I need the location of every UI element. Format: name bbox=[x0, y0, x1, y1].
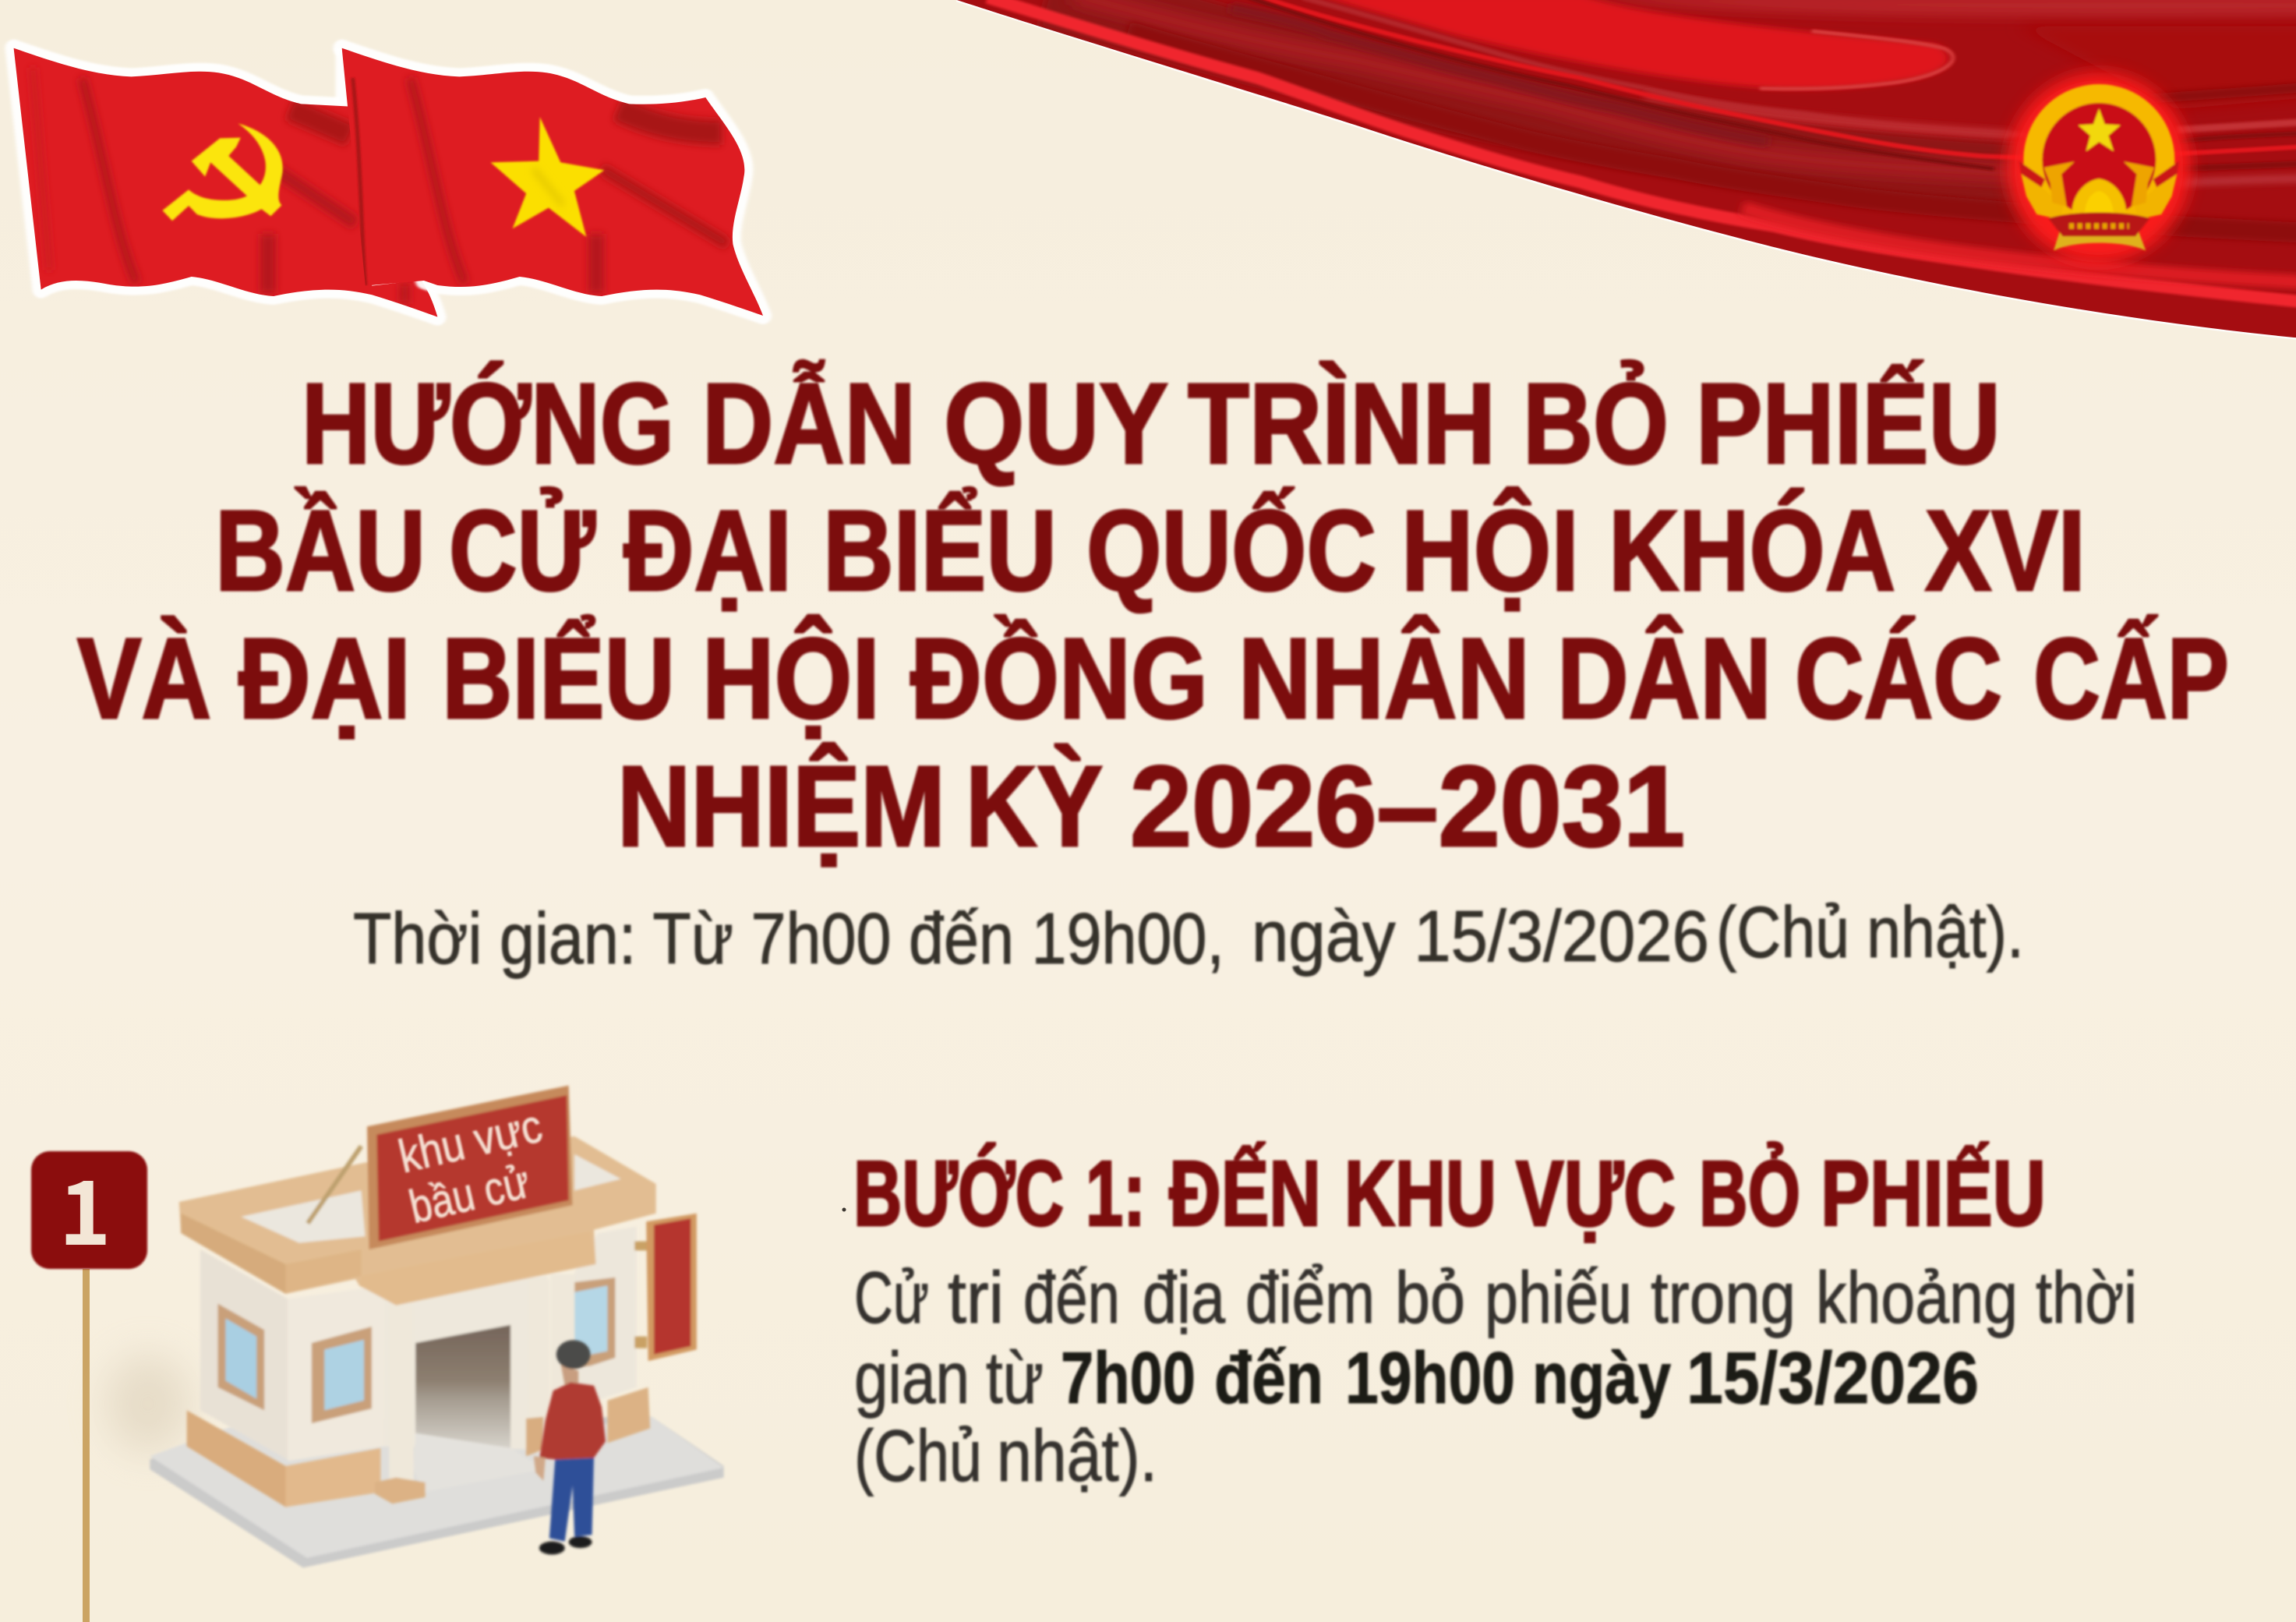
step timeline line bbox=[83, 1269, 90, 1622]
title line 2: XVI bbox=[1925, 487, 2086, 615]
wheat left bbox=[2021, 174, 2063, 220]
title line 4: KỲ bbox=[966, 743, 1103, 871]
title line 3: VÀ bbox=[77, 615, 211, 743]
subtitle: time: ngày 15/3/2026 bbox=[1252, 896, 1709, 977]
body line 2: đến bbox=[1214, 1337, 1323, 1419]
body line 2: 7h00 bbox=[1061, 1337, 1196, 1419]
title line 2: BẦU bbox=[215, 487, 426, 615]
illustration: polling station building bbox=[105, 1086, 724, 1567]
gear bbox=[2072, 178, 2126, 214]
small speck bbox=[842, 1208, 846, 1211]
body line 1: khoảng bbox=[1816, 1256, 2018, 1338]
main sign bbox=[367, 1086, 573, 1249]
shadow bbox=[105, 1355, 191, 1453]
title bbox=[77, 360, 2229, 871]
title line 1: DẪN bbox=[702, 360, 916, 488]
title line 3: BIỂU bbox=[442, 615, 675, 743]
body line 1 bbox=[854, 1256, 2137, 1338]
body line 2: 19h00 bbox=[1345, 1337, 1515, 1419]
title line 3: DÂN bbox=[1557, 615, 1771, 743]
body line 2: 15/3/2026 bbox=[1687, 1337, 1979, 1419]
sign text: bầu cử bbox=[404, 1155, 535, 1233]
legs bbox=[549, 1458, 594, 1542]
title line 2: ĐẠI bbox=[623, 487, 792, 615]
title line 2: CỬ bbox=[449, 487, 595, 615]
red banner bbox=[2048, 212, 2149, 236]
base trim bbox=[187, 1410, 286, 1507]
title line 1 bbox=[302, 360, 2001, 488]
subtitle: time bbox=[353, 892, 2024, 979]
title line 3: ĐỒNG bbox=[910, 615, 1208, 743]
title line 1: PHIẾU bbox=[1696, 360, 2001, 488]
title line 4: NHIỆM bbox=[617, 743, 945, 871]
step heading: ĐẾN bbox=[1169, 1142, 1321, 1246]
body line 2: ngày bbox=[1532, 1337, 1671, 1419]
title line 3: HỘI bbox=[702, 615, 880, 743]
walls bbox=[200, 1249, 288, 1459]
body line 3: (Chủ bbox=[854, 1415, 982, 1497]
left window bbox=[217, 1304, 264, 1410]
step heading: VỰC bbox=[1516, 1142, 1676, 1246]
red silk curtain bbox=[935, 0, 2296, 361]
title line 1: BỎ bbox=[1523, 360, 1669, 488]
title line 4 bbox=[617, 743, 1685, 871]
body line 1: bỏ bbox=[1395, 1256, 1465, 1338]
side sign bbox=[634, 1242, 647, 1250]
neck bbox=[561, 1364, 578, 1386]
title line 3: CẤP bbox=[2033, 615, 2229, 743]
party flag bbox=[4, 39, 447, 326]
roof bbox=[179, 1136, 656, 1306]
step heading: BỎ bbox=[1699, 1142, 1800, 1246]
step heading: PHIẾU bbox=[1821, 1142, 2046, 1246]
title line 2 bbox=[215, 487, 2086, 615]
title line 1: QUY bbox=[944, 360, 1168, 488]
portico back wall bbox=[384, 1276, 547, 1450]
step number badge: 1 bbox=[58, 1142, 111, 1270]
sign pole bbox=[308, 1146, 362, 1223]
body line 1: thời bbox=[2036, 1256, 2137, 1338]
torso bbox=[539, 1383, 606, 1459]
step heading: BƯỚC bbox=[853, 1142, 1064, 1246]
gold ring bbox=[2033, 94, 2165, 226]
columns bbox=[389, 1306, 414, 1482]
body line 3: nhật). bbox=[997, 1415, 1157, 1497]
title line 3: ĐẠI bbox=[238, 615, 411, 743]
step number badge bbox=[31, 1142, 147, 1270]
star bbox=[2079, 108, 2121, 151]
body line 1: phiếu bbox=[1485, 1256, 1632, 1338]
right window bbox=[574, 1277, 615, 1368]
body line 2: gian bbox=[854, 1337, 970, 1419]
subtitle: time: (Chủ nhật). bbox=[1716, 892, 2024, 973]
ground slab bbox=[150, 1417, 724, 1567]
step body text bbox=[854, 1256, 2137, 1497]
title line 4: 2026–2031 bbox=[1130, 743, 1685, 871]
star bbox=[491, 117, 604, 237]
sign text bbox=[394, 1099, 547, 1233]
national emblem bbox=[2007, 72, 2191, 263]
subtitle: time: Thời gian: Từ 7h00 đến 19h00, bbox=[353, 898, 1224, 979]
title line 2: BIỂU bbox=[823, 487, 1057, 615]
body line 1: tri bbox=[948, 1256, 1004, 1338]
national flag bbox=[332, 39, 772, 324]
step heading: KHU bbox=[1344, 1142, 1496, 1246]
title line 3 bbox=[77, 615, 2229, 743]
bottom ribbon bbox=[2054, 230, 2146, 251]
body line 2 bbox=[854, 1337, 1979, 1419]
wheat right bbox=[2135, 174, 2177, 220]
title line 2: HỘI bbox=[1401, 487, 1579, 615]
title line 2: QUỐC bbox=[1086, 487, 1376, 615]
flags bbox=[4, 39, 772, 326]
step heading: 1: bbox=[1086, 1142, 1146, 1246]
title line 1: HƯỚNG bbox=[302, 360, 674, 488]
red arms bbox=[2019, 161, 2045, 188]
title line 3: NHÂN bbox=[1238, 615, 1530, 743]
hammer and sickle bbox=[162, 123, 283, 221]
hand bbox=[534, 1456, 546, 1481]
title line 2: KHÓA bbox=[1609, 487, 1895, 615]
middle window bbox=[312, 1327, 372, 1423]
body line 1: trong bbox=[1651, 1256, 1796, 1338]
body line 1: địa bbox=[1143, 1256, 1226, 1338]
body line 1: điểm bbox=[1245, 1256, 1375, 1338]
body line 3 bbox=[854, 1415, 1157, 1497]
title line 3: CÁC bbox=[1795, 615, 2002, 743]
person bbox=[534, 1340, 606, 1555]
head bbox=[556, 1340, 591, 1369]
title line 1: TRÌNH bbox=[1188, 360, 1496, 488]
shoes bbox=[539, 1542, 565, 1555]
body line 1: đến bbox=[1023, 1256, 1120, 1338]
body line 1: Cử bbox=[854, 1256, 929, 1338]
body line 2: từ bbox=[986, 1337, 1044, 1419]
doorway bbox=[415, 1325, 510, 1448]
sign text: khu vực bbox=[394, 1099, 547, 1183]
step heading bbox=[853, 1142, 2046, 1246]
